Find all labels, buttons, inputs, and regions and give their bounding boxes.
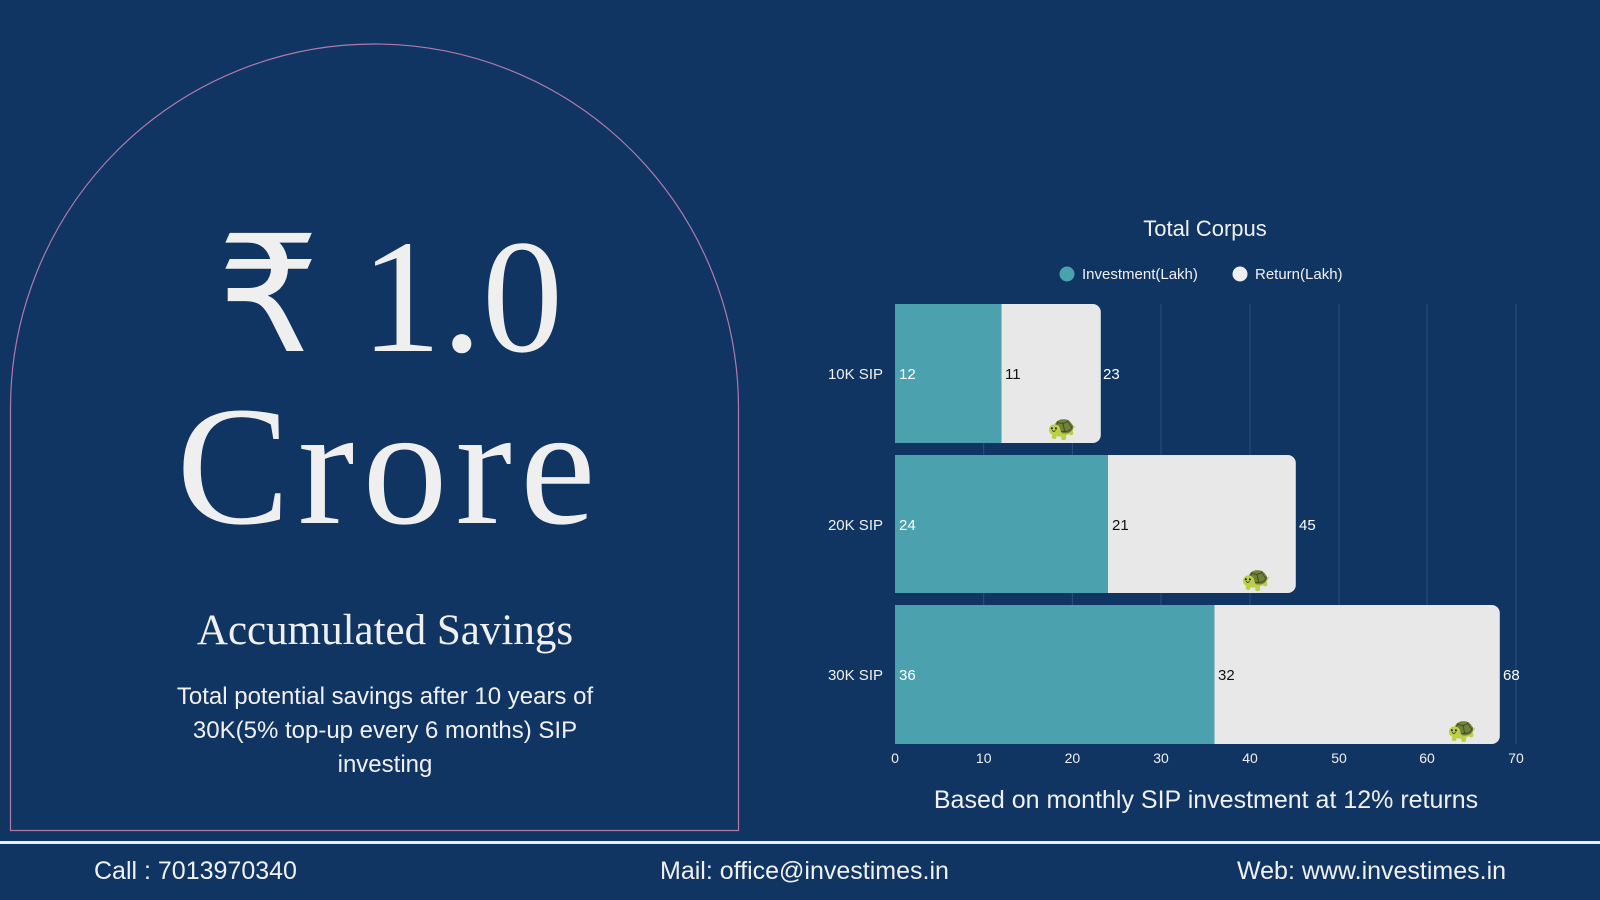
bars [828,304,1520,744]
description text: Total potential savings after 10 years of 30K(5% top-up every 6 months) SIP investing [177,683,593,778]
bars: 12 [899,366,916,383]
chart title: Total Corpus [1143,216,1267,241]
bars: 21 [1112,517,1129,534]
x axis labels: 20 [1065,750,1080,766]
heading: accumulated savings: Accumulated Savings [197,607,573,654]
footer: web: Web: www.investimes.in [1237,857,1506,885]
bars: 11 [1005,366,1021,383]
bars: 36 [899,667,916,684]
icon: turtles: 🐢 [1447,717,1477,744]
x axis labels: 60 [1419,750,1435,766]
x axis labels [891,750,1524,766]
bars: 32 [1218,667,1235,684]
icon: turtles: 🐢 [1047,415,1077,442]
chart subtitle: Based on monthly SIP investment at 12% returns [934,786,1478,814]
x axis labels: 50 [1331,750,1347,766]
x axis labels: 30 [1153,750,1169,766]
x axis labels: 0 [891,750,899,766]
x axis labels: 70 [1508,750,1524,766]
footer: mail: Mail: office@investimes.in [660,857,949,885]
chart: total corpus [828,216,1524,814]
bars: 45 [1299,517,1316,534]
bars: 68 [1503,667,1520,684]
big number: ₹ 1.0 [217,208,563,387]
legend: Investment(Lakh) [1082,266,1198,283]
bars: 23 [1103,366,1120,383]
bars: 20K SIP [828,517,883,534]
bars: 10K SIP [828,366,883,383]
big number: Crore [176,372,604,560]
footer: call: Call : 7013970340 [94,857,297,885]
arch panel [10,43,740,832]
icon: turtles [1047,415,1477,744]
bars: 24 [899,517,916,534]
x axis labels: 40 [1242,750,1258,766]
bars: 30K SIP [828,667,883,684]
x axis labels: 10 [976,750,992,766]
big number [176,208,604,560]
legend: Return(Lakh) [1255,266,1343,283]
icon: turtles: 🐢 [1241,566,1271,593]
legend [1060,266,1343,283]
